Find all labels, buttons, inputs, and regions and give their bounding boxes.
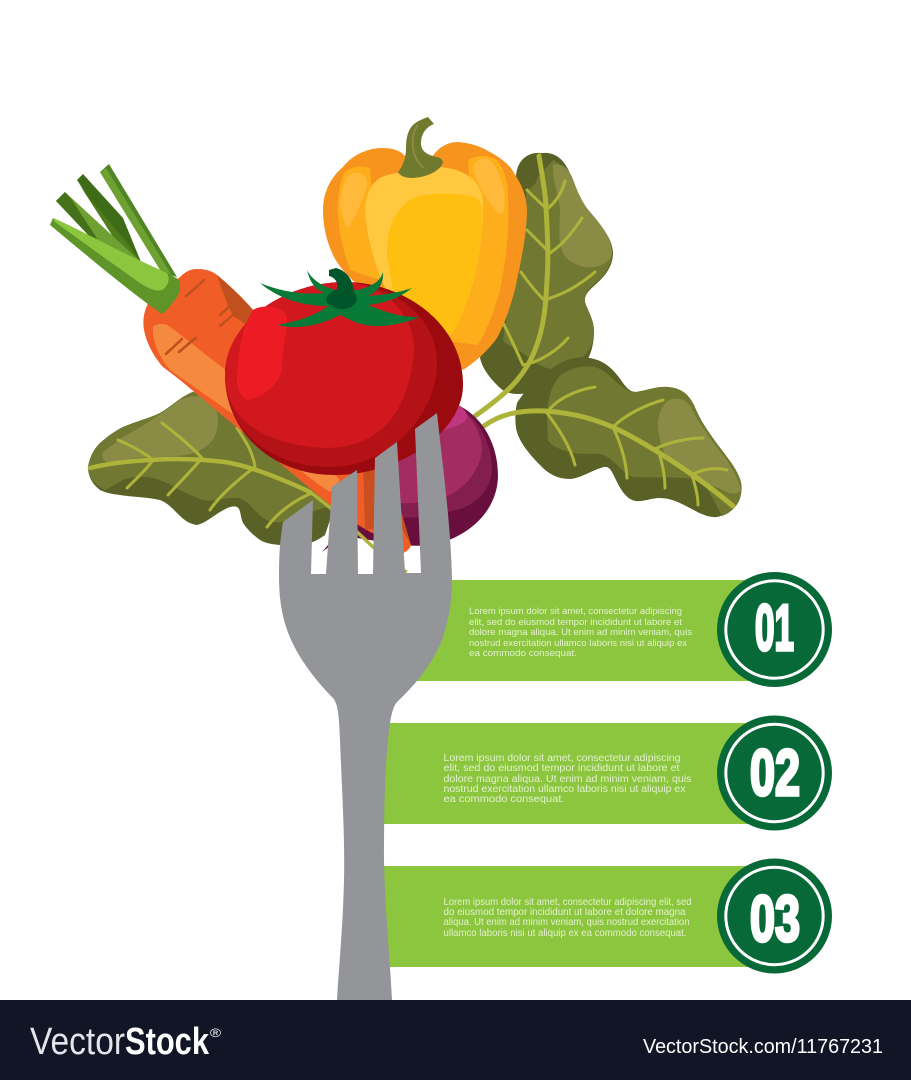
logo: VectorStock: ® bbox=[210, 1026, 221, 1040]
text block: step 1 bbox=[469, 605, 692, 658]
badge: 01 bbox=[717, 572, 832, 687]
icon: beet bbox=[322, 399, 498, 552]
text block: step 2: Lorem ipsum dolor sit amet, consectetur adipiscing bbox=[444, 753, 681, 764]
text block: step 2: dolore magna aliqua. Ut enim ad minim veniam, quis bbox=[444, 774, 692, 785]
panel: step 3 bar bbox=[370, 858, 832, 974]
panel: step 1 bar bbox=[400, 572, 832, 687]
text block: step 1: nostrud exercitation ullamco laboris nisi ut aliquip ex bbox=[469, 637, 687, 648]
icon: left leaf bbox=[88, 391, 335, 546]
icon: leaf stem under fork bbox=[310, 492, 407, 572]
footer bar bbox=[0, 1000, 911, 1080]
icon: tomato bbox=[225, 268, 463, 475]
icon: carrot marks bbox=[166, 280, 237, 354]
icon: fork bbox=[279, 413, 452, 1000]
text block: step 3: aliqua. Ut enim ad minim veniam, quis nostrud exercitation bbox=[444, 917, 690, 928]
logo: VectorStock bbox=[30, 1021, 221, 1063]
badge: 03: 03 bbox=[750, 882, 800, 955]
icon: bell pepper bbox=[323, 117, 527, 370]
text block: step 2: elit, sed do eiusmod tempor incididunt ut labore et bbox=[444, 763, 680, 774]
text block: step 1: Lorem ipsum dolor sit amet, consectetur adipiscing bbox=[469, 605, 682, 616]
text block: step 1: ea commodo consequat. bbox=[469, 647, 577, 658]
icon: tomato calyx bbox=[260, 268, 420, 327]
panel: step 2 bar bbox=[370, 716, 832, 830]
text block: step 1: elit, sed do eiusmod tempor incididunt ut labore et bbox=[469, 616, 682, 627]
icon: upper leaf veins bbox=[475, 156, 595, 416]
panel: vegetables bouquet bbox=[50, 117, 742, 572]
text block: step 3 bbox=[444, 897, 692, 939]
text block: step 2 bbox=[444, 753, 692, 805]
badge: 03 bbox=[717, 858, 832, 974]
icon: carrot greens bbox=[50, 164, 180, 314]
icon: left leaf veins bbox=[90, 423, 312, 527]
icon: pepper stem bbox=[398, 117, 443, 178]
text block: step 2: ea commodo consequat. bbox=[444, 794, 564, 805]
text block: step 3: ullamco laboris nisi ut aliquip ex ea commodo consequat. bbox=[444, 928, 686, 939]
icon: carrot bbox=[143, 269, 411, 553]
icon: right lower leaf bbox=[484, 357, 742, 517]
icon: right upper leaf bbox=[475, 153, 613, 416]
icon: lower leaf veins bbox=[484, 387, 733, 506]
logo: VectorStock: Stock bbox=[125, 1021, 210, 1063]
badge: 02: 02 bbox=[750, 736, 800, 809]
text block: step 2: nostrud exercitation ullamco laboris nisi ut aliquip ex bbox=[444, 784, 686, 795]
text block: step 3: do eiusmod tempor incididunt ut labore et dolore magna bbox=[444, 907, 686, 918]
footer text: image id: VectorStock.com/11767231 bbox=[643, 1036, 883, 1058]
text block: step 3: Lorem ipsum dolor sit amet, consectetur adipiscing elit, sed bbox=[444, 897, 692, 908]
text block: step 1: dolore magna aliqua. Ut enim ad minim veniam, quis bbox=[469, 626, 692, 637]
badge: 01: 01 bbox=[755, 591, 794, 664]
logo: VectorStock: Vector bbox=[30, 1021, 125, 1063]
badge: 02 bbox=[717, 716, 832, 830]
